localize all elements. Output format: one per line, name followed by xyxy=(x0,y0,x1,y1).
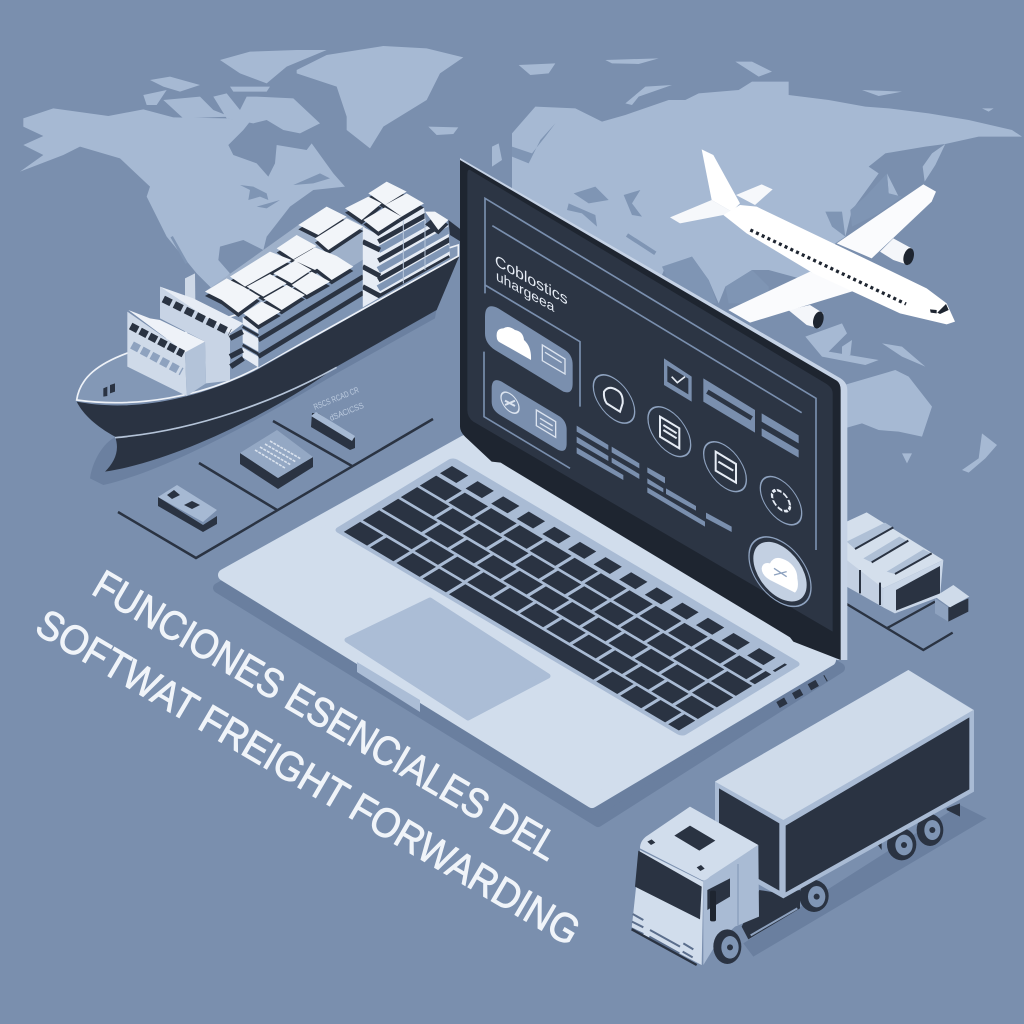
ship deck xyxy=(77,245,458,403)
container left light face xyxy=(243,317,258,367)
trackpad xyxy=(347,600,548,718)
small plan caption xyxy=(312,385,365,423)
rear superstructure xyxy=(160,273,243,383)
funnel xyxy=(185,273,195,302)
boxes right frame xyxy=(883,560,943,613)
front superstructure xyxy=(127,310,206,396)
feature circle 1 xyxy=(593,366,635,432)
tag icon xyxy=(604,388,623,412)
label module holes xyxy=(167,490,200,509)
far wing xyxy=(837,184,936,258)
map: eastern hemisphere xyxy=(492,58,1022,473)
link card xyxy=(492,380,567,451)
key rows xyxy=(352,470,781,726)
plan grid lines xyxy=(118,419,433,558)
Eurasia and Africa xyxy=(512,82,1022,303)
rear wheel far hub xyxy=(924,820,940,840)
trailer wheel hub xyxy=(808,886,825,907)
Greenland xyxy=(297,46,463,148)
cloud icon xyxy=(497,327,531,360)
title line 2: SOFTWAT FREIGHT FORWARDING xyxy=(28,600,588,955)
gear icon xyxy=(772,486,790,515)
cargo boxes xyxy=(847,512,969,650)
trailer back xyxy=(719,788,779,891)
feature circle 4 xyxy=(760,468,802,534)
top right bars xyxy=(703,378,799,458)
screen silver edge xyxy=(460,158,847,660)
North America xyxy=(20,108,345,290)
laptop base xyxy=(224,441,830,802)
Australia xyxy=(839,370,932,437)
roof lights xyxy=(647,839,705,871)
windshield xyxy=(635,851,702,919)
horizontal stabilizer near xyxy=(670,200,732,223)
airplane xyxy=(670,149,955,330)
front block right face xyxy=(185,342,206,396)
cab front xyxy=(632,850,703,965)
lower windows xyxy=(132,345,182,372)
rear axle wheels xyxy=(877,803,960,860)
ship xyxy=(77,182,461,485)
trailer xyxy=(715,670,974,939)
grille xyxy=(631,914,693,957)
row 6 xyxy=(446,470,781,668)
container tower xyxy=(362,208,450,308)
pad thickness xyxy=(240,453,313,489)
trailer front wheel xyxy=(799,880,829,912)
front wheel center xyxy=(727,944,733,950)
horizontal stabilizer far xyxy=(736,184,773,205)
rear block windows xyxy=(163,299,230,332)
row 1 xyxy=(352,527,687,726)
check badge xyxy=(664,358,692,402)
engine body xyxy=(880,238,913,265)
map: western hemisphere xyxy=(20,46,463,290)
inland waters xyxy=(512,123,769,303)
container side seams xyxy=(258,277,363,357)
Arctic islands xyxy=(143,50,327,133)
heading line 2: uhargeea xyxy=(496,268,555,316)
chassis xyxy=(742,890,800,939)
Tasmania xyxy=(902,453,912,463)
rear wheel near hub xyxy=(895,835,913,855)
front block top xyxy=(128,310,205,352)
rear block side xyxy=(160,287,230,383)
mirror xyxy=(710,891,716,921)
fuselage xyxy=(723,205,955,324)
laptop xyxy=(218,158,847,822)
front block left face xyxy=(127,312,187,396)
link icon xyxy=(501,388,519,417)
button cloud xyxy=(762,558,798,593)
cab side xyxy=(703,845,759,965)
cab xyxy=(631,807,759,965)
rear block top xyxy=(160,287,243,333)
side ports xyxy=(778,678,826,705)
cabin windows xyxy=(750,230,906,304)
tower seams xyxy=(362,213,450,298)
caption line 1: RSCS RCAD CR xyxy=(312,385,360,412)
container left bands xyxy=(243,327,258,354)
bar inner line xyxy=(707,392,752,418)
doc icon xyxy=(536,410,556,437)
tower base xyxy=(362,208,450,308)
Great Lakes xyxy=(240,173,330,208)
ring xyxy=(648,398,691,466)
ring xyxy=(704,433,746,501)
label module top xyxy=(158,485,217,522)
truck xyxy=(631,670,987,965)
label module side xyxy=(158,497,217,532)
doc icon xyxy=(660,417,679,448)
aft bay side bands xyxy=(230,332,243,367)
Gulf of California xyxy=(172,237,187,263)
laptop front notch xyxy=(357,662,420,712)
caption line 2: dSACICSS xyxy=(328,400,365,423)
far engine xyxy=(880,238,916,266)
row 4 xyxy=(409,492,744,691)
module body xyxy=(311,413,355,450)
rear wheel far xyxy=(917,814,943,846)
boxes left faces xyxy=(847,557,895,613)
engine intake xyxy=(902,247,916,266)
near wing xyxy=(728,272,857,323)
label module xyxy=(158,485,217,532)
container side face xyxy=(243,258,365,367)
tower blue bands xyxy=(378,209,450,288)
Indonesia and New Guinea xyxy=(805,323,925,367)
pad top xyxy=(240,430,313,478)
button ring xyxy=(749,525,811,618)
Persian Gulf xyxy=(627,235,655,253)
row 5 xyxy=(428,481,763,679)
keyboard xyxy=(333,457,802,737)
rear wheel near xyxy=(887,828,916,860)
upper windows xyxy=(131,326,183,354)
Kamchatka and Japan xyxy=(887,144,945,197)
trailer wheel center xyxy=(814,894,820,900)
shipping plan area xyxy=(118,385,433,558)
small box top xyxy=(935,585,969,607)
heading line 1: Coblostics xyxy=(495,252,568,309)
document pad xyxy=(240,430,313,489)
check mark xyxy=(672,377,685,383)
northern islands xyxy=(519,58,994,112)
title xyxy=(28,561,588,955)
small module xyxy=(311,412,355,450)
trailer top xyxy=(715,670,973,820)
screen heading xyxy=(495,252,568,316)
tower column gaps xyxy=(403,207,425,283)
front wheel xyxy=(713,929,741,964)
east Asia coast water xyxy=(825,173,902,237)
small box right xyxy=(948,598,968,622)
truck shadow xyxy=(743,805,987,957)
cloud card background xyxy=(485,306,573,392)
container tops xyxy=(205,182,448,325)
roof hatch xyxy=(674,826,715,851)
row 2 xyxy=(371,515,706,714)
laptop shadow xyxy=(218,450,840,822)
landing gear xyxy=(877,803,960,850)
engine intake xyxy=(811,310,825,330)
side window xyxy=(707,878,730,910)
small box left xyxy=(935,598,948,622)
link glyph xyxy=(505,401,515,406)
cab top xyxy=(640,807,758,880)
aft connector to laptop xyxy=(448,220,461,242)
boxes verticals xyxy=(860,570,880,605)
trailer frame xyxy=(715,670,974,898)
badge window xyxy=(667,366,688,394)
Scandinavia fragment xyxy=(492,143,502,167)
cloud card xyxy=(485,306,573,392)
ring xyxy=(760,468,802,534)
data bars xyxy=(577,378,799,532)
feature circle 2 xyxy=(648,398,691,466)
boxes top xyxy=(847,512,943,588)
door line xyxy=(736,864,739,925)
button fill xyxy=(753,532,807,612)
title line 1: FUNCIONES ESENCIALES DEL xyxy=(85,561,567,869)
ship lower hull xyxy=(105,367,337,472)
hull waterline xyxy=(115,367,337,438)
Iceland xyxy=(428,127,458,135)
bow bollards xyxy=(103,383,115,397)
cargo lines xyxy=(847,602,953,650)
New Zealand xyxy=(962,433,997,473)
bumper line xyxy=(632,929,697,965)
ship hull xyxy=(77,256,459,437)
trailer side xyxy=(786,717,969,892)
left bars xyxy=(577,426,639,480)
keyboard well xyxy=(333,457,802,737)
small box xyxy=(935,585,969,622)
tail fin xyxy=(702,149,740,212)
rear wheel near center xyxy=(901,842,907,848)
boxes right dark face xyxy=(896,566,940,611)
feature circle 3 xyxy=(704,433,746,501)
screen xyxy=(460,158,847,660)
cloud link glyph xyxy=(774,568,787,577)
ring xyxy=(593,366,635,432)
container backing xyxy=(205,207,365,327)
ship shadow xyxy=(90,308,437,485)
ui frame lines xyxy=(484,198,816,550)
center bars xyxy=(647,467,732,532)
rear wheel far center xyxy=(929,827,935,833)
container tops shadow xyxy=(205,186,448,329)
boxes seams xyxy=(855,527,932,574)
screen panel xyxy=(467,170,833,632)
row 3 xyxy=(390,504,725,702)
chassis step xyxy=(751,908,797,935)
badge background xyxy=(664,358,692,402)
link card background xyxy=(492,380,567,451)
doc icon xyxy=(716,452,736,483)
pad text lines xyxy=(255,441,301,468)
cockpit windows xyxy=(930,304,949,314)
screen bezel xyxy=(460,160,841,660)
card icon xyxy=(542,345,565,374)
boxes blue bands xyxy=(847,523,932,574)
module top xyxy=(311,412,355,441)
cloud button xyxy=(749,525,811,618)
engine body xyxy=(788,305,823,328)
front wheel hub xyxy=(721,936,739,959)
near engine xyxy=(788,305,825,330)
